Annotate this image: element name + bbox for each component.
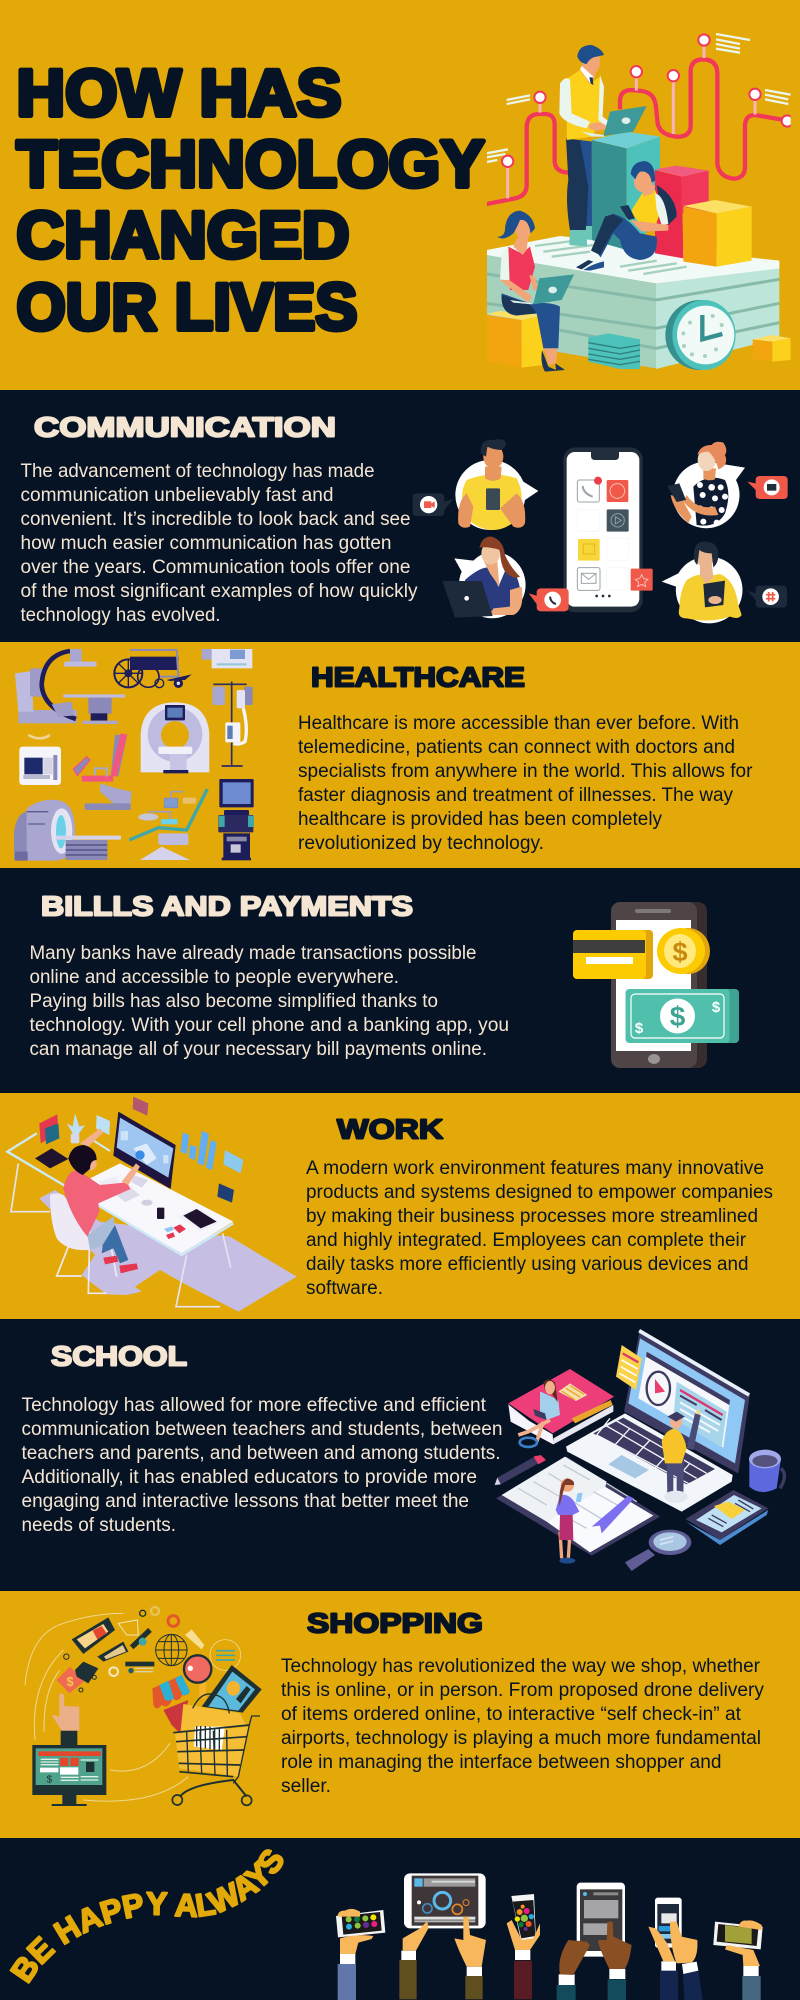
banknote (626, 989, 739, 1043)
person on chair (50, 1128, 140, 1293)
heading: bills and payments: BILLLS AND PAYMENTS (41, 890, 413, 922)
floating icons: $ (66, 1675, 74, 1689)
man with phone (455, 439, 538, 530)
monitor storefront: $ (47, 1775, 53, 1786)
text block: healthcare body: specialists from anywhere in the world. This allows for (298, 761, 753, 782)
text block: healthcare body: revolutionized by technology. (298, 833, 544, 854)
defibrillator (19, 735, 61, 785)
two hands on tablet with gears (399, 1873, 486, 1999)
timeline pins (487, 34, 793, 198)
text block: school body: Technology has allowed for more effective and efficient (22, 1395, 487, 1416)
stacked documents (487, 236, 779, 369)
monitor storefront (32, 1745, 106, 1806)
panel: header (0, 0, 800, 390)
red block (655, 166, 709, 258)
panel: shopping (0, 1591, 800, 1838)
text block: work body: and highly integrated. Employees can complete their (306, 1230, 747, 1251)
text block: communication body: technology has evolved. (20, 605, 220, 626)
text block: healthcare body: faster diagnosis and treatment of illnesses. The way (298, 785, 733, 806)
illustration: person at desk (7, 1097, 297, 1312)
smartphone with apps (563, 447, 653, 612)
panel: communication (0, 390, 800, 642)
hand with horizontal phone (336, 1909, 385, 2000)
desk legs (11, 1163, 231, 1307)
shopping cart with bag (172, 1694, 260, 1805)
text block: communication body: The advancement of technology has made (20, 461, 374, 482)
text block: school body: engaging and interactive lessons that better meet the (22, 1491, 469, 1512)
illustration: people around smartphone (413, 439, 788, 623)
c-arm x-ray (15, 649, 125, 724)
woman with phone (667, 442, 745, 528)
title: OUR LIVES (16, 270, 358, 344)
magnifier (625, 1530, 691, 1571)
text block: bills body: online and accessible to people everywhere. (30, 967, 399, 988)
bubble: slack (747, 586, 787, 608)
text block: school body (22, 1395, 502, 1536)
illustration: medical equipment (14, 649, 254, 861)
standing man with laptop (559, 45, 647, 247)
graduate with pencil (662, 1408, 701, 1503)
text block: work body: by making their business processes more streamlined (306, 1206, 758, 1227)
bubble: mail (747, 476, 788, 499)
heading: work: WORK (337, 1114, 443, 1144)
wheelchair (114, 650, 192, 688)
text block: bills body: Paying bills has also become simplified thanks to (30, 991, 438, 1012)
curved slogan: BE HAPPY ALWAYS (10, 1849, 284, 1984)
text block: school body: teachers and parents, and between and among students. (22, 1443, 500, 1464)
brown hands on tablet (557, 1883, 632, 2000)
yellow box seat (487, 311, 543, 368)
illustration: phone payments (573, 902, 739, 1068)
heading: healthcare: HEALTHCARE (311, 662, 525, 692)
desk items (98, 1177, 220, 1239)
teal column (592, 132, 660, 250)
text block: work body: products and systems designed to empower companies (306, 1182, 773, 1203)
illustration: online education (495, 1329, 784, 1571)
red timeline line (487, 59, 788, 204)
banknote: $ (712, 999, 721, 1016)
bubble: phone call (529, 588, 569, 611)
dollar coin: $ (672, 937, 688, 967)
clock (665, 300, 736, 370)
text block: bills body: Many banks have already made transactions possible (30, 943, 476, 964)
illustration: team on stacked documents with charts (487, 34, 793, 372)
text block: bills body (30, 943, 509, 1060)
text block: shopping body (281, 1656, 764, 1797)
text block: communication body: over the years. Communication tools offer one (20, 557, 411, 578)
iv stand (212, 682, 253, 766)
panel: healthcare (0, 642, 800, 868)
text block: school body: Additionally, it has enabled educators to provide more (22, 1467, 477, 1488)
examination chair (73, 733, 132, 810)
text block: school body: needs of students. (22, 1515, 176, 1536)
dental chair (129, 789, 207, 860)
text block: healthcare body (298, 713, 753, 854)
dollar coin (657, 928, 710, 974)
floor shadow (39, 1190, 297, 1312)
text block: shopping body: role in managing the interface between shopper and (281, 1752, 722, 1773)
text block: work body: daily tasks more efficiently using various devices and (306, 1254, 748, 1275)
credit card (573, 930, 653, 979)
text block: work body: software. (306, 1278, 383, 1299)
bubble: video (413, 493, 453, 516)
text block: communication body: convenient. It’s incredible to look back and see (20, 509, 410, 530)
coffee mug (749, 1450, 784, 1492)
floating icons (57, 1607, 241, 1693)
open book with reader (496, 1457, 660, 1564)
text block: communication body: of the most significant examples of how quickly (20, 581, 418, 602)
mri machine (14, 800, 121, 861)
panel: bills and payments (0, 868, 800, 1093)
panel: work (0, 1093, 800, 1319)
floating icons (35, 1097, 243, 1203)
small teal stack (588, 333, 640, 369)
title (16, 56, 484, 344)
text block: communication body: how much easier communication has gotten (20, 533, 392, 554)
text block: healthcare body: healthcare is provided has been completely (298, 809, 662, 830)
tablet (686, 1490, 768, 1545)
panel: school (0, 1319, 800, 1591)
phone (611, 902, 707, 1068)
text block: shopping body: this is online, or in person. From proposed drone delivery (281, 1680, 764, 1701)
banknote: $ (670, 1001, 686, 1032)
panel: footer (10, 1849, 763, 2000)
illustration: hands holding devices (336, 1873, 763, 2000)
picture tablet (202, 1665, 262, 1713)
small yellow cube (753, 335, 791, 362)
title: CHANGED (16, 198, 350, 272)
text block: communication body: communication unbelievably fast and (20, 485, 334, 506)
shop awning (152, 1675, 190, 1733)
pink book with student (508, 1369, 614, 1447)
desk (7, 1133, 233, 1255)
hand pointing (52, 1693, 79, 1746)
text block: shopping body: of items ordered online, to interactive “self check-in” at (281, 1704, 742, 1725)
text block: work body (306, 1158, 773, 1299)
monitor (113, 1112, 176, 1189)
pencil (495, 1455, 546, 1485)
text block: bills body: can manage all of your necessary bill payments online. (30, 1039, 487, 1060)
heading: school: SCHOOL (51, 1340, 187, 1372)
text block: healthcare body: Healthcare is more accessible than ever before. With (298, 713, 739, 734)
woman with laptop (442, 537, 526, 618)
ultrasound machine (218, 779, 254, 860)
title: HOW HAS (16, 56, 342, 130)
text block: communication body (20, 461, 418, 626)
hand with vertical phone (507, 1894, 540, 1999)
text block: shopping body: airports, technology is playing a much more fundamental (281, 1728, 761, 1749)
laptop (566, 1329, 750, 1512)
bedside monitor (202, 649, 252, 668)
hands with phone and mail (648, 1898, 703, 2000)
seated woman with laptop (497, 211, 574, 372)
dotted swoosh arcs (25, 1613, 188, 1801)
magnifier (184, 1655, 211, 1698)
hand with horizontal olive phone (713, 1920, 763, 2000)
heading: communication: COMMUNICATION (34, 412, 336, 442)
heading: shopping: SHOPPING (307, 1608, 483, 1638)
text block: bills body: technology. With your cell phone and a banking app, you (30, 1015, 509, 1036)
banknote: $ (635, 1020, 644, 1037)
sticky note (616, 1345, 642, 1390)
title: TECHNOLOGY (16, 128, 484, 200)
text block: shopping body: seller. (281, 1776, 331, 1797)
yellow block (683, 200, 752, 267)
woman with tablet (662, 542, 742, 623)
text block: work body: A modern work environment features many innovative (306, 1158, 764, 1179)
illustration: online shopping (25, 1607, 262, 1806)
text block: healthcare body: telemedicine, patients can connect with doctors and (298, 737, 735, 758)
seated woman with tablet (576, 161, 677, 271)
ct scanner (141, 702, 209, 773)
text block: school body: communication between teachers and students, between (22, 1419, 502, 1440)
text block: shopping body: Technology has revolutionized the way we shop, whether (281, 1656, 761, 1677)
